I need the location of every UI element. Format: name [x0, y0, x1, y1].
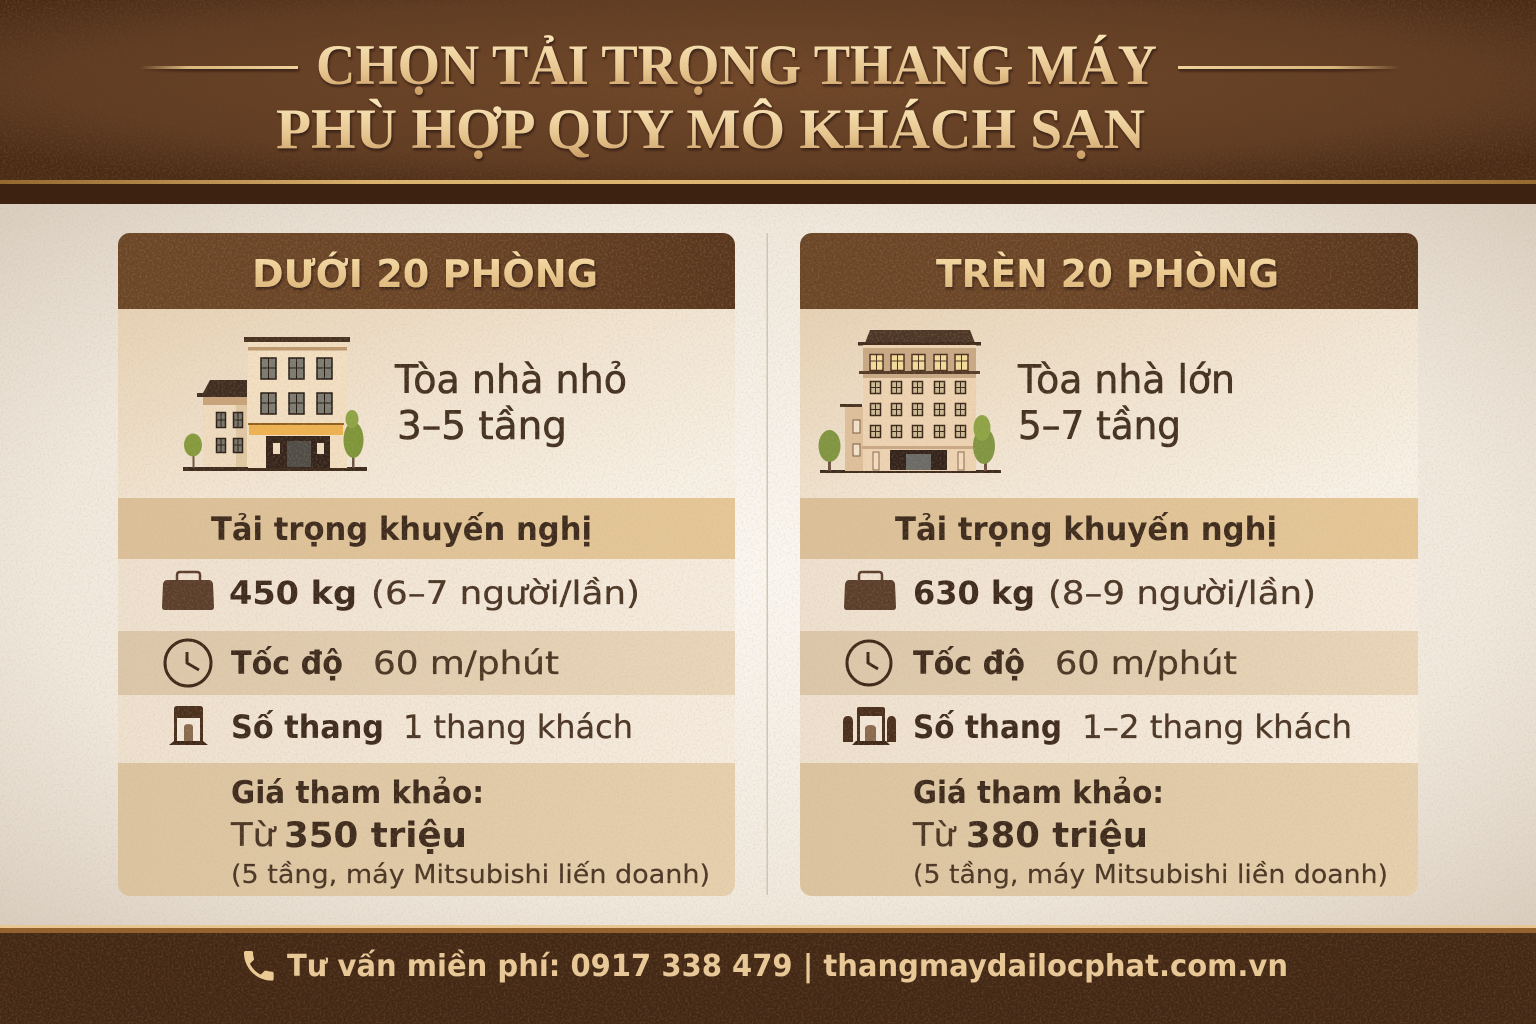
row: speed [800, 631, 1418, 695]
row: speed: Tốc độ [231, 644, 343, 682]
block: reference price: 350 triệu [284, 816, 467, 856]
row: number of lifts [800, 695, 1418, 763]
block: reference price [118, 763, 735, 896]
text: large building description: Tòa nhà lớn [1017, 358, 1235, 403]
row: number of lifts: 1 thang khách [403, 708, 633, 746]
block: reference price [800, 763, 1418, 896]
band: recommended load heading [118, 498, 735, 559]
icon: clock [847, 641, 891, 685]
row: capacity: 630 kg [913, 574, 1035, 612]
row: number of lifts: Số thang [913, 708, 1062, 746]
text: small building description: Tòa nhà nhỏ [394, 358, 627, 403]
icon: phone [244, 951, 274, 981]
panel header: over 20 rooms: TRÈN 20 PHÒNG [936, 252, 1279, 296]
row: capacity: (6–7 người/lần) [371, 574, 640, 612]
row: number of lifts [118, 695, 735, 763]
building section: small building [118, 309, 735, 498]
block: reference price: Từ [912, 816, 957, 854]
footer banner [0, 925, 1536, 1024]
header banner [0, 0, 1536, 204]
text: large building description: 5–7 tầng [1018, 404, 1181, 449]
building section: large building [800, 309, 1418, 498]
icon: clock [165, 640, 211, 686]
row: capacity [800, 559, 1418, 631]
title: PHÙ HỢP QUY MÔ KHÁCH SẠN [276, 98, 1145, 161]
block: reference price: (5 tầng, máy Mitsubishi liến doanh) [231, 860, 710, 890]
text: small building description [394, 358, 627, 449]
icon: large hotel building [818, 330, 1001, 473]
footer contact text: Tư vấn miền phí: 0917 338 479 | thangmaydailocphat.com.vn [287, 949, 1288, 984]
row: number of lifts: 1–2 thang khách [1082, 708, 1352, 746]
icon: small hotel building [183, 337, 367, 471]
panel: left, under 20 rooms [118, 233, 735, 896]
panel: right, over 20 rooms [800, 233, 1418, 896]
row: speed: 60 m/phút [1055, 644, 1237, 682]
row: capacity [118, 559, 735, 631]
panel header: under 20 rooms [118, 233, 735, 309]
row: speed: Tốc độ [913, 644, 1025, 682]
block: reference price: Từ [230, 816, 277, 854]
row: capacity: (8–9 người/lần) [1048, 574, 1316, 612]
block: reference price: 380 triệu [966, 816, 1148, 856]
row: number of lifts: Số thang [231, 708, 384, 746]
panel header: under 20 rooms: DƯỚI 20 PHÒNG [252, 252, 598, 296]
text: small building description: 3–5 tầng [397, 404, 567, 449]
title [140, 34, 1400, 161]
title: CHỌN TẢI TRỌNG THANG MÁY [316, 34, 1157, 97]
band: recommended load heading: Tải trọng khuyến nghị [211, 510, 592, 548]
row: speed [118, 631, 735, 695]
text: large building description [1017, 358, 1235, 449]
icon: multiple lifts [843, 707, 896, 745]
block: reference price: (5 tầng, máy Mitsubishi liền doanh) [913, 860, 1388, 890]
band: recommended load heading [800, 498, 1418, 559]
row: capacity: 450 kg [229, 574, 357, 612]
band: recommended load heading: Tải trọng khuyến nghị [895, 510, 1277, 548]
page body background [0, 204, 1536, 928]
icon: briefcase [844, 572, 896, 610]
icon: briefcase [162, 572, 214, 610]
panel header: over 20 rooms [800, 233, 1418, 309]
row: speed: 60 m/phút [373, 644, 559, 682]
block: reference price: Giá tham khảo: [913, 775, 1164, 811]
block: reference price: Giá tham khảo: [231, 775, 484, 811]
icon: single lift [169, 706, 208, 745]
